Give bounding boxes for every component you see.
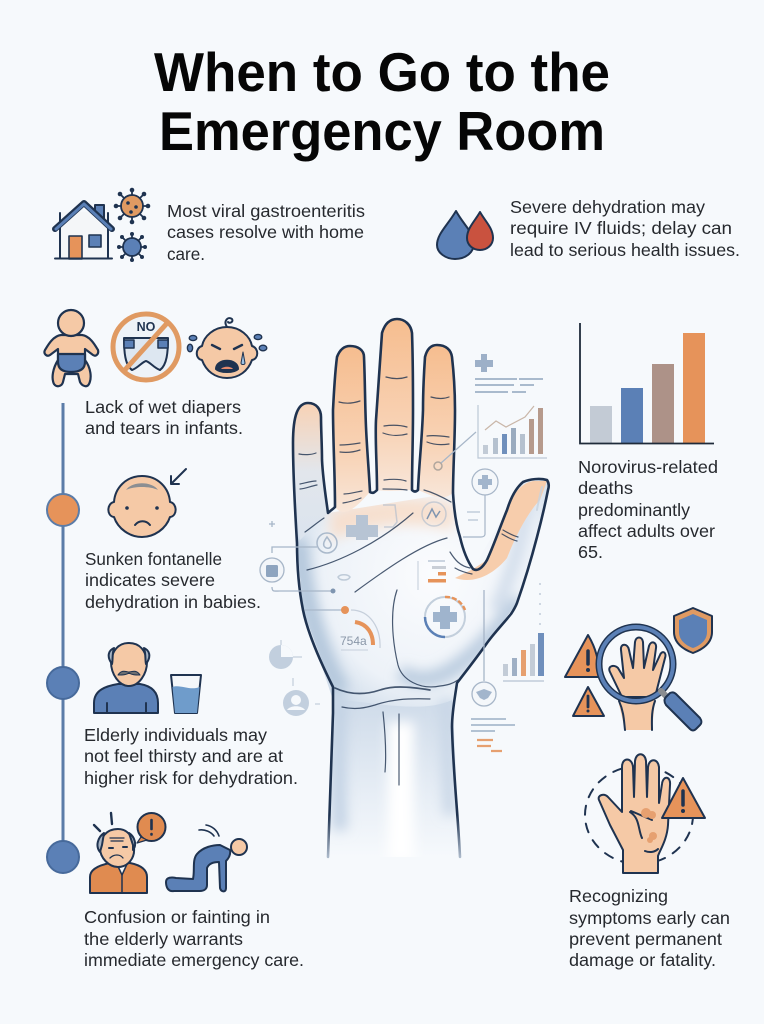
hand: creases	[299, 377, 542, 785]
text: recognizing: damage or fatality.	[569, 950, 716, 970]
text: norovirus: deaths	[578, 478, 633, 498]
icon: hand with rash and warning	[585, 754, 705, 873]
title	[154, 41, 610, 162]
icon: fainting person	[166, 825, 247, 891]
text: confusion	[84, 907, 304, 970]
text: norovirus: predominantly	[578, 500, 690, 520]
hand: palm	[293, 443, 548, 707]
hand: thumb fill	[455, 481, 547, 580]
lower right bar chart	[503, 583, 544, 681]
handshake node	[472, 590, 496, 706]
text: elderly thirst: higher risk for dehydration.	[84, 768, 298, 788]
text: recognizing	[569, 886, 730, 970]
text: norovirus: 65.	[578, 542, 603, 562]
text: dehydration: require IV fluids; delay can	[510, 218, 732, 238]
palm gauge: 754a	[340, 634, 367, 648]
text: recognizing: Recognizing	[569, 886, 668, 906]
mini bar chart	[478, 405, 547, 458]
text: confusion: the elderly warrants	[84, 929, 243, 949]
icon: no diapers	[113, 314, 179, 380]
text: dehydration	[510, 197, 740, 260]
text: elderly thirst: not feel thirsty and are at	[84, 746, 283, 766]
text: infants	[85, 397, 243, 438]
icon: crying baby	[187, 318, 267, 378]
text: infants: and tears in infants.	[85, 418, 243, 438]
text: confusion: Confusion or fainting in	[84, 907, 270, 927]
lines with orange bars	[418, 561, 446, 590]
icon: confused elderly man	[90, 813, 166, 893]
title: Emergency Room	[159, 100, 605, 162]
icon: magnifier over hand with warnings	[565, 608, 712, 730]
side icon: person	[283, 678, 320, 716]
text: norovirus: Norovirus-related	[578, 457, 718, 477]
text: confusion: immediate emergency care.	[84, 950, 304, 970]
hand: outline	[293, 319, 549, 857]
side icon: bottle node	[260, 521, 336, 594]
text: recognizing: prevent permanent	[569, 929, 722, 949]
hand illustration	[260, 319, 549, 862]
icon: elderly man with water	[94, 643, 201, 713]
timeline spine	[47, 403, 79, 873]
hand: ring finger fill	[333, 346, 370, 512]
text: norovirus	[578, 457, 718, 562]
hand: pinky fill	[293, 403, 328, 540]
icon: sunken fontanelle baby	[108, 469, 186, 537]
bar chart: norovirus deaths	[580, 323, 714, 444]
text: home care	[167, 201, 365, 264]
text: infants: Lack of wet diapers	[85, 397, 241, 417]
text: norovirus: affect adults over	[578, 521, 715, 541]
hand: forearm	[328, 690, 460, 857]
side icon: pie	[269, 640, 302, 669]
text: dehydration: lead to serious health issues.	[510, 240, 740, 260]
hand: middle finger fill	[376, 319, 413, 491]
title: When to Go to the	[154, 41, 610, 103]
palm icons	[317, 502, 446, 580]
text: home care: Most viral gastroenteritis	[167, 201, 365, 221]
lines below handshake	[471, 719, 515, 751]
text: home care: care.	[167, 244, 205, 264]
hand: soft shading	[299, 498, 528, 862]
icon: baby	[44, 310, 98, 386]
text: elderly thirst	[84, 725, 298, 788]
text: home care: cases resolve with home	[167, 222, 364, 242]
icon: no diapers: NO	[137, 320, 156, 334]
mini cross and lines	[475, 354, 543, 392]
text: fontanelle: dehydration in babies.	[85, 592, 261, 612]
palm gauge	[305, 606, 380, 650]
hand: index finger fill	[418, 345, 455, 497]
text: dehydration: Severe dehydration may	[510, 197, 705, 217]
callout connector	[434, 432, 498, 537]
text: recognizing: symptoms early can	[569, 908, 730, 928]
text: fontanelle: indicates severe	[85, 570, 215, 590]
icon: blood and water drops	[437, 211, 493, 259]
text: fontanelle: Sunken fontanelle	[85, 549, 222, 569]
icon: house with viruses	[55, 188, 150, 262]
text: elderly thirst: Elderly individuals may	[84, 725, 267, 745]
text: fontanelle	[85, 549, 261, 612]
palm cross badge	[425, 597, 465, 637]
